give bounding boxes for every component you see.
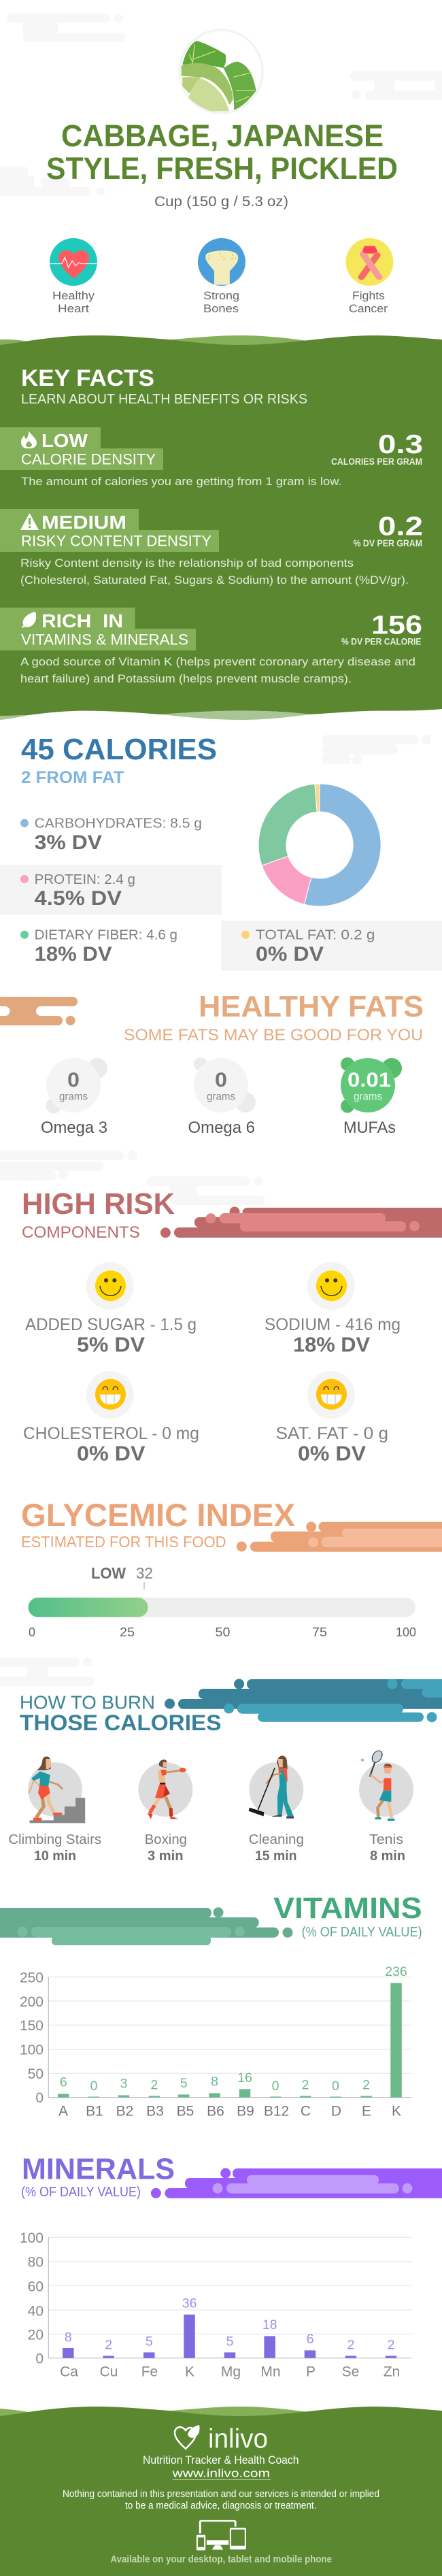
macro: protein: PROTEIN: 2.4 g	[35, 872, 135, 887]
vitamins bar chart: B3	[146, 2103, 164, 2119]
heading: high risk: HIGH RISK	[22, 1187, 175, 1221]
fat: omega 6: Omega 6	[188, 1119, 255, 1137]
macro: dietary fiber: 18% DV	[35, 943, 112, 965]
vitamins bar chart: B9	[237, 2103, 254, 2119]
benefit: fights cancer: Cancer	[349, 302, 388, 315]
activity: cleaning: 15 min	[255, 1849, 296, 1864]
minerals bar chart: Mn	[260, 2364, 281, 2380]
tagline and link	[143, 2454, 299, 2480]
risk: saturated fat	[276, 1371, 388, 1466]
minerals bar chart: Ca	[60, 2364, 78, 2380]
minerals bar chart: Zn	[384, 2364, 400, 2380]
macro: total fat: 0% DV	[256, 943, 324, 965]
macro: dietary fiber: DIETARY FIBER: 4.6 g	[35, 928, 177, 943]
minerals bar chart: 2	[105, 2337, 112, 2352]
fact: low calorie density: The amount of calories you are getting from 1 gram is low.	[21, 475, 342, 488]
fact: medium risky content density: MEDIUM	[41, 512, 126, 533]
benefit: healthy heart: Heart	[58, 302, 89, 315]
heading: glycemic index	[21, 1497, 295, 1551]
risk: added sugar: ADDED SUGAR - 1.5 g	[25, 1315, 197, 1334]
logo: inlivo	[175, 2424, 268, 2454]
vitamins bar chart: B1	[86, 2103, 103, 2119]
minerals bar chart: Fe	[141, 2364, 158, 2380]
fact: rich in vitamins and minerals: VITAMINS & MINERALS	[21, 631, 188, 648]
deco: teal brush	[165, 1679, 442, 1722]
minerals bar chart: Se	[342, 2364, 359, 2380]
vitamins bar chart: 50	[28, 2066, 44, 2082]
fact: medium risky content density	[0, 509, 423, 587]
activity: tenis: 8 min	[370, 1849, 405, 1864]
heading: vitamins	[273, 1892, 422, 1940]
fat: mufas: grams	[354, 1091, 382, 1103]
activity: tenis: Tenis	[369, 1832, 403, 1847]
vitamins bar chart: B2	[116, 2103, 133, 2119]
heading: how to burn those calories: HOW TO BURN	[20, 1692, 155, 1713]
tagline and link: www.inlivo.com	[171, 2467, 270, 2480]
vitamins bar chart: A	[58, 2103, 68, 2119]
vitamins bar chart: 16	[237, 2070, 252, 2085]
benefit: strong bones: Strong	[203, 289, 239, 302]
fat: omega 6: grams	[207, 1091, 235, 1103]
deco: green brush	[0, 1907, 292, 1945]
vitamins bar chart: 5	[180, 2076, 188, 2091]
vitamins bar chart: 150	[20, 2018, 44, 2034]
disclaimer: to be a medical advice, diagnosis or treatment.	[125, 2500, 317, 2511]
activity: boxing	[138, 1760, 192, 1864]
risk: cholesterol: 0% DV	[77, 1442, 146, 1466]
minerals bar chart: Mg	[221, 2364, 241, 2380]
heading: 45 calories: 2 FROM FAT	[21, 768, 124, 787]
glycemic index gauge: 75	[312, 1625, 327, 1639]
heading: glycemic index: GLYCEMIC INDEX	[21, 1497, 295, 1533]
fact: medium risky content density: Risky Content density is the relationship of bad components	[20, 557, 354, 569]
fact: low calorie density	[0, 427, 423, 488]
minerals bar chart	[20, 2230, 411, 2380]
macro: protein	[0, 865, 222, 915]
tagline and link: Nutrition Tracker & Health Coach	[143, 2454, 299, 2466]
heading: key facts: LEARN ABOUT HEALTH BENEFITS OR RISKS	[21, 392, 307, 407]
risk: cholesterol	[23, 1371, 199, 1466]
minerals bar chart: 100	[20, 2230, 44, 2246]
vitamins bar chart: B5	[177, 2103, 194, 2119]
fact: low calorie density: CALORIES PER GRAM	[331, 457, 422, 467]
fat: mufas: MUFAs	[343, 1119, 396, 1137]
availability note: Available on your desktop, tablet and mobile phone	[110, 2554, 332, 2565]
minerals bar chart: 18	[262, 2317, 277, 2332]
fat: omega 3: grams	[59, 1091, 88, 1103]
panel: key facts	[0, 335, 442, 720]
risk: saturated fat: 0% DV	[298, 1442, 366, 1466]
title: STYLE, FRESH, PICKLED	[46, 151, 398, 186]
vitamins bar chart: E	[362, 2103, 371, 2119]
glycemic index gauge: 100	[396, 1625, 416, 1639]
minerals bar chart: Cu	[100, 2364, 118, 2380]
fact: rich in vitamins and minerals: heart failure) and Potassium (helps prevent muscle cramps).	[20, 672, 352, 685]
fact: rich in vitamins and minerals: % DV PER CALORIE	[341, 637, 422, 646]
risk: sodium	[265, 1262, 401, 1357]
glycemic index gauge: 32	[136, 1564, 153, 1582]
macro donut chart	[258, 784, 381, 906]
benefit: fights cancer: Fights	[352, 289, 385, 302]
heading: how to burn those calories: THOSE CALORIES	[20, 1711, 222, 1735]
fat: mufas	[341, 1057, 402, 1137]
fact: rich in vitamins and minerals: A good source of Vitamin K (helps prevent coronary artery disease and	[20, 655, 415, 668]
vitamins bar chart: 2	[302, 2077, 309, 2092]
heading: minerals	[21, 2152, 175, 2200]
fact: rich in vitamins and minerals: 156	[371, 611, 422, 640]
glycemic index gauge: 50	[215, 1625, 230, 1639]
disclaimer: Nothing contained in this presentation and our services is intended or implied	[63, 2488, 379, 2500]
vitamins bar chart: B12	[264, 2103, 289, 2119]
vitamins bar chart: 250	[20, 1970, 44, 1985]
activity: cleaning: Cleaning	[249, 1832, 304, 1847]
minerals bar chart: 5	[146, 2334, 153, 2349]
fat: omega 3: Omega 3	[41, 1119, 107, 1137]
icon: devices	[197, 2521, 246, 2550]
minerals bar chart: 2	[347, 2337, 354, 2352]
activity: climbing stairs	[8, 1756, 101, 1864]
minerals bar chart: 80	[28, 2255, 44, 2270]
fat: omega 6: 0	[215, 1069, 227, 1091]
heading: vitamins: VITAMINS	[273, 1892, 422, 1925]
risk: cholesterol: CHOLESTEROL - 0 mg	[23, 1424, 199, 1443]
fact: low calorie density: 0.3	[378, 430, 423, 459]
glycemic index gauge: 0	[29, 1625, 35, 1639]
activity: tenis	[359, 1749, 413, 1864]
minerals bar chart: K	[185, 2364, 194, 2380]
fat: omega 3	[41, 1058, 107, 1137]
disclaimer	[63, 2488, 379, 2511]
risk: sodium: SODIUM - 416 mg	[265, 1315, 401, 1334]
vitamins bar chart: 0	[90, 2079, 98, 2094]
heading: high risk: COMPONENTS	[22, 1223, 140, 1242]
risk: sodium: 18% DV	[293, 1333, 370, 1357]
minerals bar chart: 60	[28, 2279, 44, 2294]
heading: healthy fats: SOME FATS MAY BE GOOD FOR YOU	[124, 1026, 423, 1044]
fact: medium risky content density: 0.2	[378, 512, 423, 542]
macro: total fat: TOTAL FAT: 0.2 g	[256, 928, 375, 943]
activity: climbing stairs: 10 min	[34, 1849, 76, 1864]
vitamins bar chart: 100	[20, 2042, 44, 2058]
food photo: cabbage	[180, 30, 262, 113]
minerals bar chart: P	[306, 2364, 316, 2380]
benefit: healthy heart	[50, 238, 97, 315]
title	[46, 118, 398, 186]
risk: added sugar	[25, 1262, 197, 1357]
heading: how to burn those calories	[20, 1692, 222, 1735]
vitamins bar chart: 0	[35, 2090, 44, 2106]
benefit: strong bones	[198, 238, 245, 315]
vitamins bar chart: C	[301, 2103, 311, 2119]
minerals bar chart: 0	[35, 2351, 44, 2366]
heading: minerals: MINERALS	[22, 2152, 175, 2185]
vitamins bar chart: 2	[150, 2077, 158, 2092]
vitamins bar chart: 200	[20, 1994, 44, 2010]
vitamins bar chart: 6	[60, 2075, 67, 2090]
macro: protein: 4.5% DV	[35, 887, 122, 910]
glycemic index gauge: LOW	[91, 1564, 126, 1582]
fact: low calorie density: CALORIE DENSITY	[21, 450, 156, 468]
heading: minerals: (% OF DAILY VALUE)	[21, 2185, 141, 2200]
macro: dietary fiber	[20, 928, 177, 965]
minerals bar chart: 2	[388, 2337, 394, 2352]
fact: rich in vitamins and minerals: RICH IN	[41, 610, 123, 631]
heading: glycemic index: ESTIMATED FOR THIS FOOD	[21, 1533, 226, 1551]
vitamins bar chart: B6	[207, 2103, 224, 2119]
deco: orange brush	[0, 997, 78, 1025]
risk: saturated fat: SAT. FAT - 0 g	[276, 1424, 388, 1443]
title: CABBAGE, JAPANESE	[61, 118, 384, 153]
fact: low calorie density: LOW	[41, 430, 88, 451]
activity: climbing stairs: Climbing Stairs	[8, 1832, 101, 1847]
fact: medium risky content density: RISKY CONTENT DENSITY	[21, 532, 211, 550]
vitamins bar chart: 236	[385, 1964, 407, 1979]
benefit: fights cancer	[345, 238, 393, 315]
vitamins bar chart: K	[392, 2103, 401, 2119]
logo: inlivo: inlivo	[208, 2424, 268, 2454]
vitamins bar chart: 0	[272, 2079, 279, 2094]
fact: medium risky content density: % DV PER GRAM	[354, 538, 422, 548]
deco: orange brush right	[237, 1521, 442, 1552]
benefit: healthy heart: Healthy	[52, 289, 95, 302]
fat: omega 6	[188, 1057, 256, 1137]
minerals bar chart: 40	[28, 2303, 44, 2319]
heading: vitamins: (% OF DAILY VALUE)	[302, 1925, 422, 1940]
minerals bar chart: 20	[28, 2327, 44, 2343]
serving size: Cup (150 g / 5.3 oz)	[154, 194, 288, 210]
heading: 45 calories: 45 CALORIES	[21, 733, 217, 766]
glycemic index gauge	[29, 1564, 416, 1639]
fat: mufas: 0.01	[347, 1069, 391, 1091]
vitamins bar chart: 8	[211, 2075, 218, 2090]
macro: carbohydrates	[20, 816, 202, 854]
activity: boxing: 3 min	[148, 1849, 184, 1864]
activity: cleaning	[249, 1755, 304, 1864]
benefit: strong bones: Bones	[203, 302, 239, 315]
deco: red brush	[160, 1207, 442, 1238]
macro: carbohydrates: 3% DV	[35, 831, 102, 854]
deco: purple brush	[151, 2168, 442, 2198]
fact: rich in vitamins and minerals	[0, 608, 422, 685]
footer panel	[0, 2407, 442, 2576]
macro: total fat	[221, 921, 442, 971]
fact: medium risky content density: (Cholesterol, Saturated Fat, Sugars & Sodium) to the amount (%DV/gr).	[20, 574, 409, 587]
heading: high risk	[22, 1187, 175, 1242]
fat: omega 3: 0	[67, 1069, 80, 1091]
activity: boxing: Boxing	[145, 1832, 187, 1847]
minerals bar chart: 6	[307, 2332, 313, 2347]
vitamins bar chart: 0	[332, 2079, 339, 2094]
minerals bar chart: 8	[65, 2330, 72, 2345]
minerals bar chart: 5	[226, 2334, 234, 2349]
glycemic index gauge: 25	[120, 1625, 135, 1639]
vitamins bar chart	[20, 1964, 411, 2119]
heading: healthy fats	[124, 990, 424, 1044]
macro: carbohydrates: CARBOHYDRATES: 8.5 g	[35, 816, 202, 831]
heading: healthy fats: HEALTHY FATS	[199, 990, 424, 1023]
vitamins bar chart: D	[331, 2103, 341, 2119]
vitamins bar chart: 3	[120, 2077, 127, 2092]
heading: key facts: KEY FACTS	[21, 365, 154, 391]
heading: 45 calories	[21, 733, 217, 787]
vitamins bar chart: 2	[362, 2077, 370, 2092]
minerals bar chart: 36	[182, 2296, 197, 2311]
heading: key facts	[21, 365, 307, 407]
risk: added sugar: 5% DV	[77, 1333, 145, 1357]
